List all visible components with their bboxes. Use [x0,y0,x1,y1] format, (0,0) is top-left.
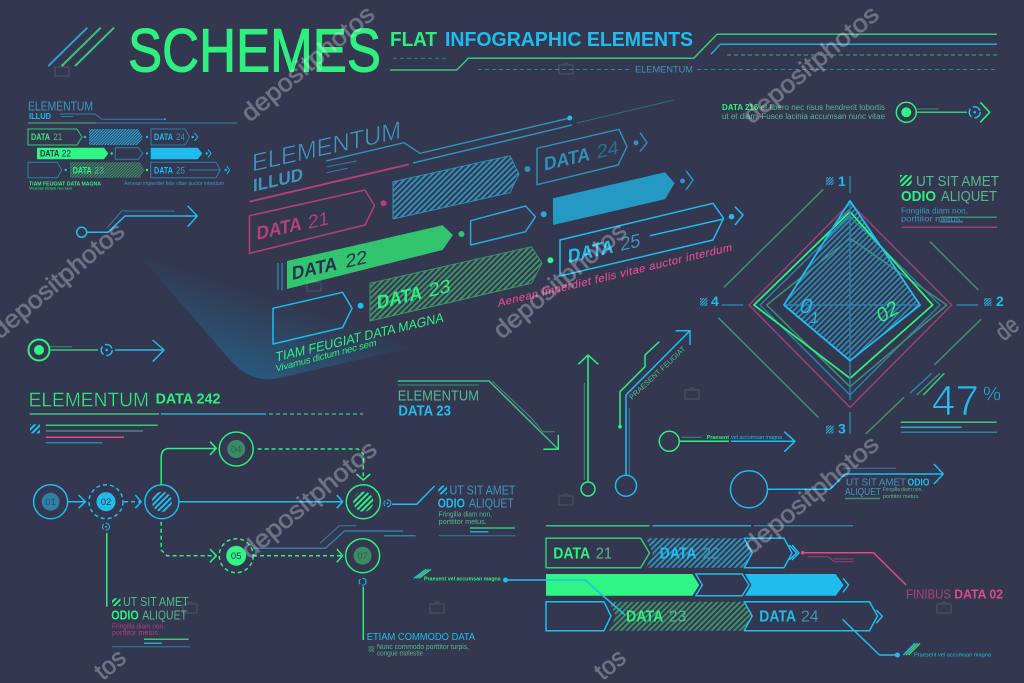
text block: ut sit amet flow right [438,483,516,536]
radar axis labels: 2 [996,293,1004,309]
header: diagonal slashes [48,28,114,66]
watermark: depositphotos [236,435,383,565]
text block: data 216 [722,103,886,121]
flow dashed arrow 04-06 [258,449,370,480]
text block: ut sit amet flow left [111,595,190,647]
callout: left bars caption [414,569,625,615]
bar: data 23: DATA [626,609,663,626]
radar axis labels: 4 [711,293,719,309]
box: solid blue [553,172,675,225]
flow node 02 [89,485,123,519]
box: data 25 [560,203,724,276]
box: data 21: DATA [257,214,302,245]
text block: ut sit amet flow right: ALIQUET [469,496,514,510]
text block: ut sit amet arrow: ALIQUET [845,486,881,498]
bar: data 24: DATA [759,609,796,626]
text block: ut sit amet right: UT SIT AMET [916,173,999,190]
arrow: green and blue connector [28,340,164,362]
arrow: elementum data 23 [398,381,558,449]
text block: ut sit amet right: Fringilla diam non, [901,206,968,215]
flow node 01 [34,485,68,519]
text block: ut sit amet right: porttitor metus. [901,215,963,224]
text block: ut sit amet arrow: Fringilla diam non, [883,487,923,493]
header label: ELEMENTUM [635,64,693,74]
small row 1: DATA [154,132,173,142]
small row 3: DATA [73,165,92,175]
flow node 07 [346,539,380,573]
radar value 01: 1 [810,309,820,327]
watermark camera icons [55,63,951,613]
radar axis labels: 3 [838,420,846,436]
small row 1: DATA [31,132,50,142]
panel: bottom bars [546,526,882,631]
small row 3: 25 [176,165,185,175]
arrow: green circle with caption: vel accumsan magna [731,435,783,441]
text block: ut sit amet arrow [845,477,930,500]
radar value 01: 0 [798,294,814,319]
percentage value: % [983,384,1001,406]
text block: ut sit amet right: ALIQUET [941,188,997,205]
radar value 02: 02 [872,297,903,327]
callout: right bars caption [842,619,992,659]
marker: solid blue [680,171,693,190]
percentage value [901,373,1001,432]
arrow: green circle with caption [659,431,795,452]
arrow: diagonal blue [616,331,690,496]
background panel glow [145,250,520,379]
small row 1: 24 [176,132,185,142]
small captions: TIAM FEUGIAT DATA MAGNA [29,181,101,187]
flow arrow 02-03 [124,495,141,508]
bar: data 21: 21 [596,545,612,562]
title: SCHEMES [128,16,381,84]
box: data 24: DATA [544,144,590,176]
bar: data 24 [744,602,882,631]
heading: elementum data 242 [29,390,220,412]
flow node 05 [219,539,253,573]
flow node 01: 01 [45,497,56,508]
bar: green fill [546,574,699,596]
text block: ut sit amet flow right: ODIO [438,496,465,510]
bar: data 23: 23 [669,609,686,626]
text block: ut sit amet arrow: ODIO [908,477,930,489]
radar axes [722,176,978,434]
header rules [390,34,997,70]
box: data 24: 24 [597,138,619,163]
bar: outline bottom [546,602,611,631]
callout: finibus data 02: DATA 02 [954,587,1003,601]
radar series [749,201,952,407]
box: data 25: DATA [568,237,614,268]
box: data 24 [537,129,627,185]
bar: data 24: 24 [801,609,819,626]
flow node 03 [145,485,179,519]
small captions: Vivamus dictum nec sem [29,186,73,190]
flow main arrow 03-06 [179,495,343,508]
text block: etiam commodo: congue molestie [377,650,423,657]
callout: finibus data 02: FINIBUS [906,587,951,601]
text block: ut sit amet flow left: porttitor metus. [112,630,160,637]
flow dashed arrow 03-05 [161,522,216,562]
watermark: depositphotos [236,0,380,128]
callout: left bars caption: Praesent vel accumsan magna [424,577,502,583]
callout: finibus data 02 [801,551,1003,601]
arrow: up green [578,355,598,496]
text block: elementum data 23: DATA 23 [398,404,451,420]
text block: etiam commodo: ETIAM COMMODO DATA [367,631,475,643]
bar: blue fill [745,574,848,596]
bar: data 21: DATA [553,545,590,562]
radar outer diagonals [718,189,981,434]
small row 3 [28,162,230,178]
text block: data 216: DATA 216 et libero nec risus hendrerit lobortis [722,103,885,112]
text block: ut sit amet flow left: ODIO [111,608,139,622]
subtitle: INFOGRAPHIC ELEMENTS [445,29,693,51]
marker: data 25 [729,207,743,225]
small heading rules [28,114,237,123]
small row 2 [37,148,211,159]
watermark: depositphotos [488,217,632,345]
box: data 23: 23 [429,276,451,302]
flow node 04 [219,432,253,466]
slanted heading: ILLUD [253,163,303,196]
text block: ut sit amet flow left: Fringilla diam non, [112,623,165,630]
text block: ut sit amet flow right: UT SIT AMET [450,483,516,497]
flow diagram [34,432,435,640]
bar: data 23 [609,602,752,631]
slanted caption green: TIAM FEUGIAT DATA MAGNA [276,310,444,365]
flow node 07: 07 [357,551,368,562]
slanted heading rules [250,100,674,202]
connector: top right [896,102,990,122]
text block: ut sit amet flow right: porttitor metus. [439,519,487,526]
heading: elementum data 242: DATA 242 [156,390,220,407]
percentage value: 47 [932,377,979,425]
small captions: Aenean imperdiet felis vitae auctor interdum [124,181,224,187]
box: data 25: 25 [620,231,640,256]
heading: elementum data 242: ELEMENTUM [29,390,149,412]
text block: ut sit amet right [900,173,999,227]
connector: green stepped line [618,342,659,429]
small row 3: 23 [94,165,104,175]
bars top rules [546,525,853,527]
text block: ut sit amet arrow: UT SIT AMET [846,477,907,489]
bar: data 22: 22 [702,545,720,562]
flow dashed arrow 05-07 [253,526,416,562]
text block: ut sit amet flow right: Fringilla diam non, [439,512,492,519]
watermark: depositphotos [738,0,885,130]
connector: 07 callout [359,578,366,640]
slanted heading: ELEMENTUM [252,116,401,178]
small heading [28,100,93,121]
callout: right bars caption: Praesent vel accumsan magna [914,653,992,659]
connector: 02 callout [102,523,110,607]
text block: data 216: ut et diam. Fusce lacinia accumsan nunc vitae [722,112,886,121]
box: data 22 [278,225,453,290]
panel: small data diagram [28,100,237,190]
subtitle: FLAT [390,29,437,51]
text block: elementum data 23 [398,389,479,420]
small heading: ILLUD [29,111,51,121]
radar value 01 [798,294,820,327]
text block: etiam commodo [367,631,475,657]
label: praesent feugiat: PRAESENT FEUGIAT [627,344,688,401]
connector: 06 callout [384,486,435,507]
bar: data 22: DATA [660,545,696,562]
small row 2: 22 [62,149,71,159]
watermark: depositphotos [738,430,885,560]
small row 2: DATA [40,149,60,159]
bar: outline top [744,538,799,568]
bar: data 22 [646,538,752,568]
box: large blue outline [273,292,352,344]
text block: ut sit amet right: ODIO [901,188,936,205]
small row 1 [28,129,198,145]
small row 3: DATA [154,165,173,175]
flow node 05: 05 [231,551,241,562]
box: data 22: DATA [292,254,337,285]
slanted caption pink: Aenean imperdiet felis vitae auctor interdum [498,242,732,310]
text block: ut sit amet flow left: UT SIT AMET [123,595,189,609]
text block: ut sit amet arrow: porttitor metus. [883,494,920,500]
text block: elementum data 23: ELEMENTUM [398,389,479,405]
small heading: ELEMENTUM [28,100,93,114]
panel: slanted data diagram [250,100,743,375]
slanted caption green: Vivamus dictum nec sem [276,338,377,375]
flow arrow to 04 [161,442,216,485]
flow node 02: 02 [101,497,111,508]
box: hatched blue [393,156,519,219]
flow node 06 [346,485,380,519]
arrow: blue circle connector [77,206,197,237]
small captions [29,181,224,190]
text block: etiam commodo: Nunc commodo porttitor turpis, [377,644,469,651]
flow node 04: 04 [231,444,241,455]
flow arrow 01-02 [68,495,85,508]
box: data 21 [250,190,374,253]
bar: data 21 [546,538,650,568]
radar axis labels [700,173,1004,436]
box: small blue outline [471,206,535,245]
bar: outline middle [696,574,749,596]
box: data 23: DATA [377,283,422,314]
marker: data 24 [634,133,647,152]
heading rules [30,414,363,443]
box: data 21: 21 [308,208,329,234]
radar chart [700,173,1004,436]
box: data 23 [370,247,542,321]
arrow: large blue circle [730,464,943,508]
text block: ut sit amet flow left: ALIQUET [142,608,187,622]
small row 1: 21 [53,132,62,142]
radar axis labels: 1 [838,173,846,189]
arrow: green circle with caption: Praesent [707,435,729,441]
box: data 22: 22 [346,247,367,273]
